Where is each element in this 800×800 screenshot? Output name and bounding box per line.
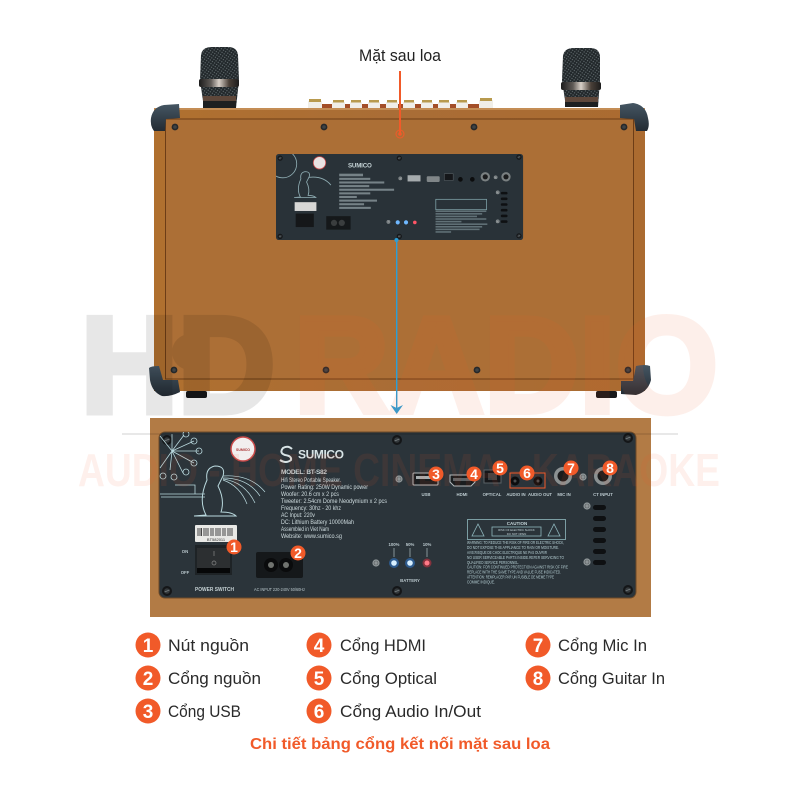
port: mic in: MIC IN	[557, 492, 571, 497]
caution box	[468, 520, 566, 540]
small control plate on speaker	[269, 150, 523, 240]
caption: Chi tiết bảng cổng kết nối mặt sau loa	[250, 735, 550, 753]
port: USB: USB	[421, 492, 431, 497]
port: audio in and out: AUDIO IN	[506, 492, 526, 497]
legend item 4: 4	[314, 636, 325, 657]
port: HDMI	[450, 475, 475, 497]
port: audio in and out	[506, 473, 552, 497]
icon: right microphone	[561, 48, 601, 107]
legend item 1	[136, 632, 249, 658]
legend item 2: 2	[143, 669, 153, 690]
warning text: WARNING: TO REDUCE THE RISK OF FIRE OR ELECTRIC SHOCK,	[467, 540, 564, 545]
legend	[136, 632, 665, 724]
port: USB	[413, 473, 438, 497]
legend item 4: Cổng HDMI	[340, 637, 426, 655]
logo: Sumico	[280, 447, 344, 462]
caution box: CAUTION	[507, 521, 527, 526]
model specification text: Power Rating: 250W Dynamic power	[281, 485, 368, 491]
legend item 6: 6	[314, 702, 324, 723]
watermark: RADIO: RADIO	[294, 289, 718, 441]
model specification text: Tweeter: 2.54cm Dome Neodymium x 2 pcs	[281, 499, 387, 505]
legend item 5: 5	[314, 669, 325, 690]
port: optical: OPTICAL	[483, 492, 502, 497]
legend item 2	[136, 666, 261, 690]
legend item 5	[306, 666, 437, 690]
warning text: CAUTION: FOR CONTINUED PROTECTION AGAINST RISK OF FIRE	[467, 564, 568, 570]
battery indicator LEDs: BATTERY	[400, 578, 420, 583]
legend item 7	[526, 632, 647, 658]
legend item 6: Cổng Audio In/Out	[340, 703, 481, 721]
plate screws	[162, 433, 633, 596]
plate number badges: 7	[567, 460, 575, 476]
watermark: HD: HD	[81, 289, 275, 441]
warning text: AVIS:RISQUE DE CHOC ELECTRIQUE NE PAS OUVRIR	[467, 550, 547, 555]
power switch	[181, 545, 234, 593]
power switch: OFF	[181, 570, 190, 575]
model specification text: DC: Lithium Battery 10000Mah	[281, 520, 354, 526]
speaker screws	[171, 124, 631, 373]
plate number badges: 2	[294, 545, 302, 561]
small control plate on speaker: SUMICO	[348, 162, 372, 169]
logo: Sumico: SUMICO	[298, 448, 344, 462]
legend item 3	[136, 698, 241, 724]
model specification text: Hifi Stereo Portable Speaker.	[281, 478, 341, 484]
legend item 1: Nút nguồn	[168, 637, 249, 655]
warning text: REPLACE WITH THE SAME TYPE AND VALUE FUSE INDICATED.	[467, 570, 561, 574]
corner protectors	[149, 103, 651, 396]
warning text	[467, 540, 568, 584]
model specification text: Website: www.sumico.sg	[281, 534, 342, 540]
legend item 5: Cổng Optical	[340, 670, 437, 688]
model specification text: Frequency: 30hz - 20 khz	[281, 506, 341, 512]
battery indicator LEDs	[388, 542, 432, 583]
model specification text: Assembled in Viet Nam	[281, 527, 329, 533]
plate number badges: 3	[432, 466, 440, 482]
battery indicator LEDs: 100%	[388, 542, 400, 547]
power switch: ON	[182, 549, 188, 554]
heading: Mặt sau loa: Mặt sau loa	[359, 46, 441, 65]
model specification text: Woofer: 20.6 cm x 2 pcs	[281, 492, 339, 498]
warning text: NO USER SERVICEABLE PARTS INSIDE.REFER SERVICING TO	[467, 555, 565, 560]
speaker body	[149, 103, 651, 398]
plate number badges: 1	[230, 539, 238, 555]
plate number badges: 5	[496, 460, 504, 476]
vent slots	[593, 505, 606, 565]
barcode label: BT582011	[207, 537, 226, 542]
watermark	[78, 289, 720, 496]
blue arrow	[390, 238, 403, 414]
warning text: COMME INDIQUE.	[467, 580, 495, 584]
sticker: SUMICO	[236, 448, 250, 452]
plate number badges	[226, 460, 618, 561]
model specification text	[281, 469, 387, 540]
plate number badges: 4	[470, 466, 478, 482]
warning text: DO NOT EXPOSE THIS APPLIANCE TO RAIN OR MOISTURE.	[467, 545, 559, 550]
port: guitar input: CT INPUT	[593, 492, 613, 497]
top connectors row	[308, 98, 493, 109]
plate number badges: 8	[606, 460, 614, 476]
legend item 7: Cổng Mic In	[558, 637, 647, 655]
legend item 3: 3	[143, 702, 153, 723]
caution box: DO NOT OPEN	[507, 532, 526, 536]
feet	[186, 391, 617, 398]
plate number badges: 6	[523, 465, 531, 481]
detail control plate	[159, 431, 636, 598]
sticker	[231, 437, 255, 461]
caution box: RISK OF ELECTRIC SHOCK	[498, 528, 535, 532]
battery indicator LEDs: 50%	[406, 542, 414, 547]
legend item 8	[526, 666, 665, 690]
legend item 7: 7	[533, 636, 543, 657]
legend item 8: Cổng Guitar In	[558, 670, 665, 688]
power socket: AC INPUT 220-240V 50/60Hz	[254, 587, 305, 592]
model specification text: AC Input: 220v	[281, 513, 315, 519]
port: optical	[483, 470, 502, 497]
warning text: ATTENTION: REMPLACER PAR UN FUSIBLE DE MEME TYPE	[467, 574, 554, 580]
port: mic in	[554, 467, 572, 497]
legend item 6	[306, 698, 481, 724]
barcode label	[195, 525, 237, 542]
battery indicator LEDs: 10%	[423, 542, 431, 547]
legend item 3: Cổng USB	[168, 703, 241, 721]
legend item 2: Cổng nguồn	[168, 670, 261, 688]
legend item 1: 1	[143, 636, 154, 657]
port: audio in and out: AUDIO OUT	[528, 492, 552, 497]
orange callout line	[396, 71, 404, 138]
icon: ferris wheel and merlion artwork	[160, 431, 265, 516]
power switch: POWER SWITCH	[195, 587, 234, 593]
port: HDMI: HDMI	[457, 492, 467, 497]
warning text: QUALIFIED SERVICE PERSONNEL.	[467, 560, 519, 565]
leather panel background	[150, 418, 651, 617]
icon: left microphone	[199, 47, 239, 108]
power socket	[254, 552, 305, 592]
model specification text: MODEL: BT-S82	[281, 469, 327, 476]
legend item 4	[306, 632, 426, 658]
legend item 8: 8	[533, 669, 543, 690]
port: guitar input	[593, 467, 613, 497]
